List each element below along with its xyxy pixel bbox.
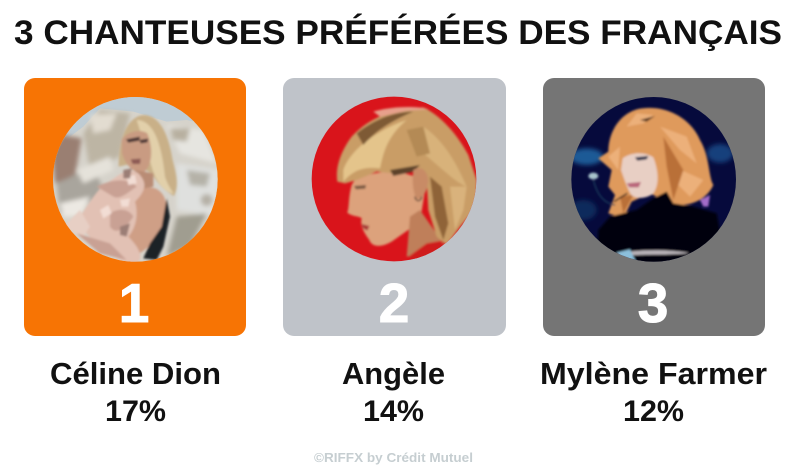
name and share: Angèle: 14%	[363, 395, 424, 428]
rank number 3: 3	[638, 272, 668, 334]
name and share: Mylène Farmer: 12%	[623, 395, 684, 428]
portrait: Angèle	[310, 93, 480, 267]
rank number 1: 1	[119, 272, 149, 334]
source credit: ©RIFFX by Crédit Mutuel	[314, 450, 473, 465]
name and share: Céline Dion: 17%	[105, 395, 166, 428]
portrait: Mylène Farmer	[570, 93, 740, 270]
rank number 2: 2	[379, 272, 409, 334]
panel: Angèle	[283, 78, 506, 336]
name and share: Angèle: Angèle	[342, 356, 445, 391]
portrait: Céline Dion	[50, 93, 223, 267]
panel: Céline Dion	[24, 78, 246, 336]
name and share: Angèle	[342, 356, 445, 428]
card background	[543, 78, 765, 336]
name and share: Céline Dion	[50, 356, 221, 428]
card background	[24, 78, 246, 336]
panel: Mylène Farmer	[543, 78, 765, 336]
name and share: Mylène Farmer	[540, 356, 767, 428]
name and share: Céline Dion: Céline Dion	[50, 356, 221, 391]
name and share: Mylène Farmer: Mylène Farmer	[540, 356, 767, 391]
title: 3 CHANTEUSES PRÉFÉRÉES DES FRANÇAIS	[14, 14, 782, 52]
card background	[283, 78, 506, 336]
